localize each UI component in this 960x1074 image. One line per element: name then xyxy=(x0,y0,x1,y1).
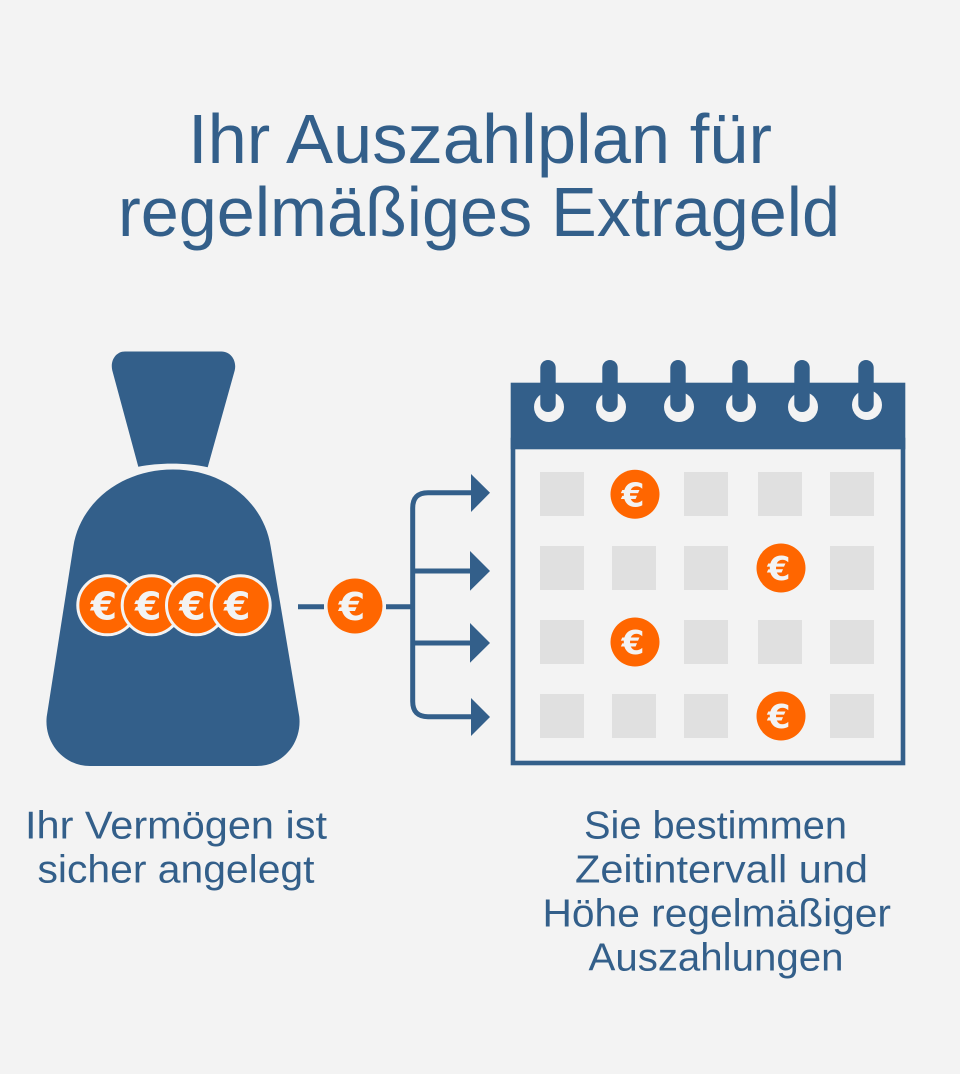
calendar frame xyxy=(513,440,903,763)
title: regelmäßiges Extrageld xyxy=(118,173,840,251)
calendar coin row 4: € xyxy=(767,697,790,736)
calendar coin row 4 xyxy=(756,692,806,740)
coin 2 xyxy=(122,576,181,635)
calendar coin row 1 xyxy=(610,470,660,519)
coin 3 xyxy=(166,576,226,635)
coin 4: € xyxy=(223,584,250,628)
coin 3: € xyxy=(178,584,206,628)
coin 2: € xyxy=(134,584,161,628)
coin 4 xyxy=(211,576,270,635)
coin stack xyxy=(78,576,270,635)
coin 1 xyxy=(78,576,137,635)
icon: calendar xyxy=(511,360,905,763)
coin 1: € xyxy=(90,584,117,628)
calendar coin row 3 xyxy=(610,618,660,666)
binder holes xyxy=(534,390,882,422)
arrow heads xyxy=(470,474,490,736)
calendar coin row 2: € xyxy=(767,549,790,588)
right caption: Sie bestimmen xyxy=(584,804,847,848)
title xyxy=(118,100,840,251)
calendar coin row 3: € xyxy=(621,623,644,662)
left caption xyxy=(25,804,327,892)
bag body xyxy=(46,470,300,766)
left caption: sicher angelegt xyxy=(38,848,315,892)
calendar day squares xyxy=(540,472,874,738)
right caption xyxy=(542,804,891,980)
right caption: Höhe regelmäßiger xyxy=(542,893,891,936)
calendar header xyxy=(511,383,905,449)
left caption: Ihr Vermögen ist xyxy=(25,804,327,848)
calendar coin row 2 xyxy=(756,544,806,592)
branching arrows xyxy=(410,474,490,736)
right caption: Zeitintervall und xyxy=(575,848,868,892)
binder rings xyxy=(540,360,874,412)
center coin: € xyxy=(338,585,365,629)
icon: money bag xyxy=(46,352,300,766)
connector with euro coin xyxy=(298,578,412,634)
bag neck xyxy=(112,352,235,467)
title: Ihr Auszahlplan für xyxy=(188,100,772,178)
right caption: Auszahlungen xyxy=(588,937,844,980)
calendar coin row 1: € xyxy=(621,476,644,514)
